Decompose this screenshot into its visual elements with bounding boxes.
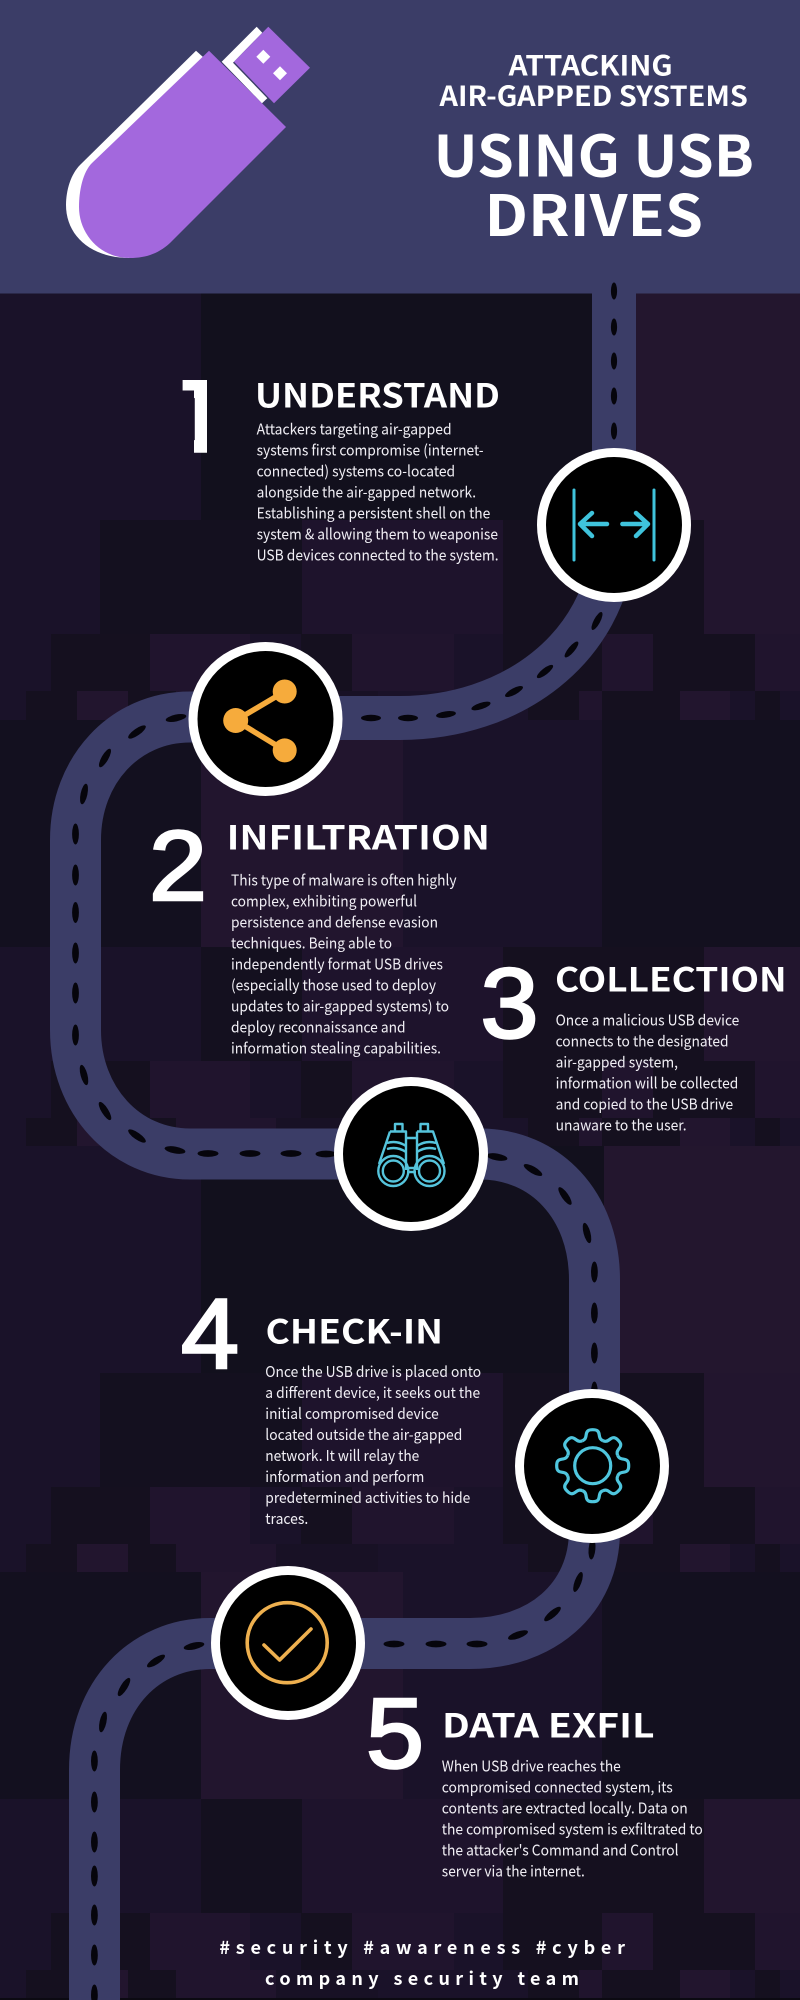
body text: collection: and copied to the USB drive [556,1094,733,1114]
body text: understand: connected) systems co-located [257,460,455,482]
title [434,43,754,253]
number 2: 2 [149,810,207,921]
marker 4: gear icon [520,1394,664,1538]
body text: infiltration: persistence and defense evasion [231,912,438,932]
heading: check-in: CHECK-IN [266,1305,443,1353]
number 4: 4 [181,1278,239,1389]
title: AIR-GAPPED SYSTEMS [438,74,748,114]
body text: check-in: information and perform [265,1466,424,1487]
body text: collection: Once a malicious USB device [556,1010,739,1030]
marker 2: share icon [193,646,338,792]
title: ATTACKING [508,43,673,83]
title: DRIVES [484,171,703,253]
body text: data exfil: When USB drive reaches the [442,1756,621,1777]
body text: data exfil: the compromised system is exfiltrated to [442,1819,703,1840]
step 3: collection [480,948,787,1136]
body text: data exfil: the attacker's Command and Control [442,1840,679,1861]
body text: check-in: initial compromised device [265,1403,439,1424]
body text: infiltration: information stealing capabilities. [231,1038,441,1058]
footer hashtags [219,1934,625,1991]
body text: infiltration: (especially those used to deploy [231,974,436,996]
step 2: infiltration [149,810,490,1058]
footer hashtags: #security #awareness #cyber [219,1934,625,1960]
body text: check-in: Once the USB drive is placed onto [265,1361,481,1382]
body text: infiltration: deploy reconnaissance and [231,1016,406,1038]
body text: understand: systems first compromise (internet- [257,440,484,460]
body text: collection: connects to the designated [556,1030,729,1052]
body text: collection: air-gapped system, [556,1052,678,1072]
body text: infiltration [231,870,457,1058]
marker 5: check icon [216,1570,360,1716]
body text: infiltration: updates to air-gapped systems) to [231,996,449,1016]
number 5: 5 [366,1678,424,1788]
body text: infiltration: complex, exhibiting powerful [231,890,417,912]
marker 3: binoculars icon [338,1082,484,1226]
title: USING USB [434,112,754,194]
heading: infiltration: INFILTRATION [227,812,490,860]
heading: collection: COLLECTION [555,954,787,1002]
number 1 [182,380,207,453]
step 5: data exfil [366,1678,703,1882]
body text: understand: USB devices connected to the system. [257,544,499,566]
body text: data exfil [442,1756,703,1882]
body text: data exfil: contents are extracted locally. Data on [442,1798,688,1819]
body text: collection [556,1010,739,1136]
icon: USB drive [66,27,310,258]
body text: data exfil: compromised connected system, its [442,1777,673,1798]
step 1: understand [182,380,498,564]
body text: understand: system & allowing them to weaponise [257,524,498,544]
body text: check-in: predetermined activities to hide [265,1487,470,1508]
body text: data exfil: server via the internet. [442,1861,585,1882]
body text: collection: information will be collected [556,1072,738,1094]
step 4: check-in [181,1278,481,1529]
body text: understand: alongside the air-gapped network. [257,482,476,502]
body text: understand [257,418,499,566]
header band [0,0,800,294]
number 3: 3 [480,948,538,1058]
marker 1: width arrows icon [542,452,686,598]
footer hashtags: company security team [265,1965,579,1991]
body text: infiltration: This type of malware is often highly [231,870,457,890]
body text: understand: Attackers targeting air-gapped [257,418,452,440]
body text: check-in: traces. [265,1508,308,1529]
body text: collection: unaware to the user. [556,1114,687,1136]
body text: infiltration: techniques. Being able to [231,932,392,954]
heading: understand: UNDERSTAND [255,369,500,417]
body text: understand: Establishing a persistent shell on the [257,502,490,524]
body text: check-in: located outside the air-gapped [265,1424,462,1445]
body text: check-in: a different device, it seeks out the [265,1382,480,1403]
winding road [72,270,617,2000]
body text: infiltration: independently format USB drives [231,954,443,974]
heading: data exfil: DATA EXFIL [442,1700,654,1748]
body text: check-in [265,1361,481,1529]
number 1: 1 [173,361,230,475]
body text: check-in: network. It will relay the [265,1445,419,1466]
